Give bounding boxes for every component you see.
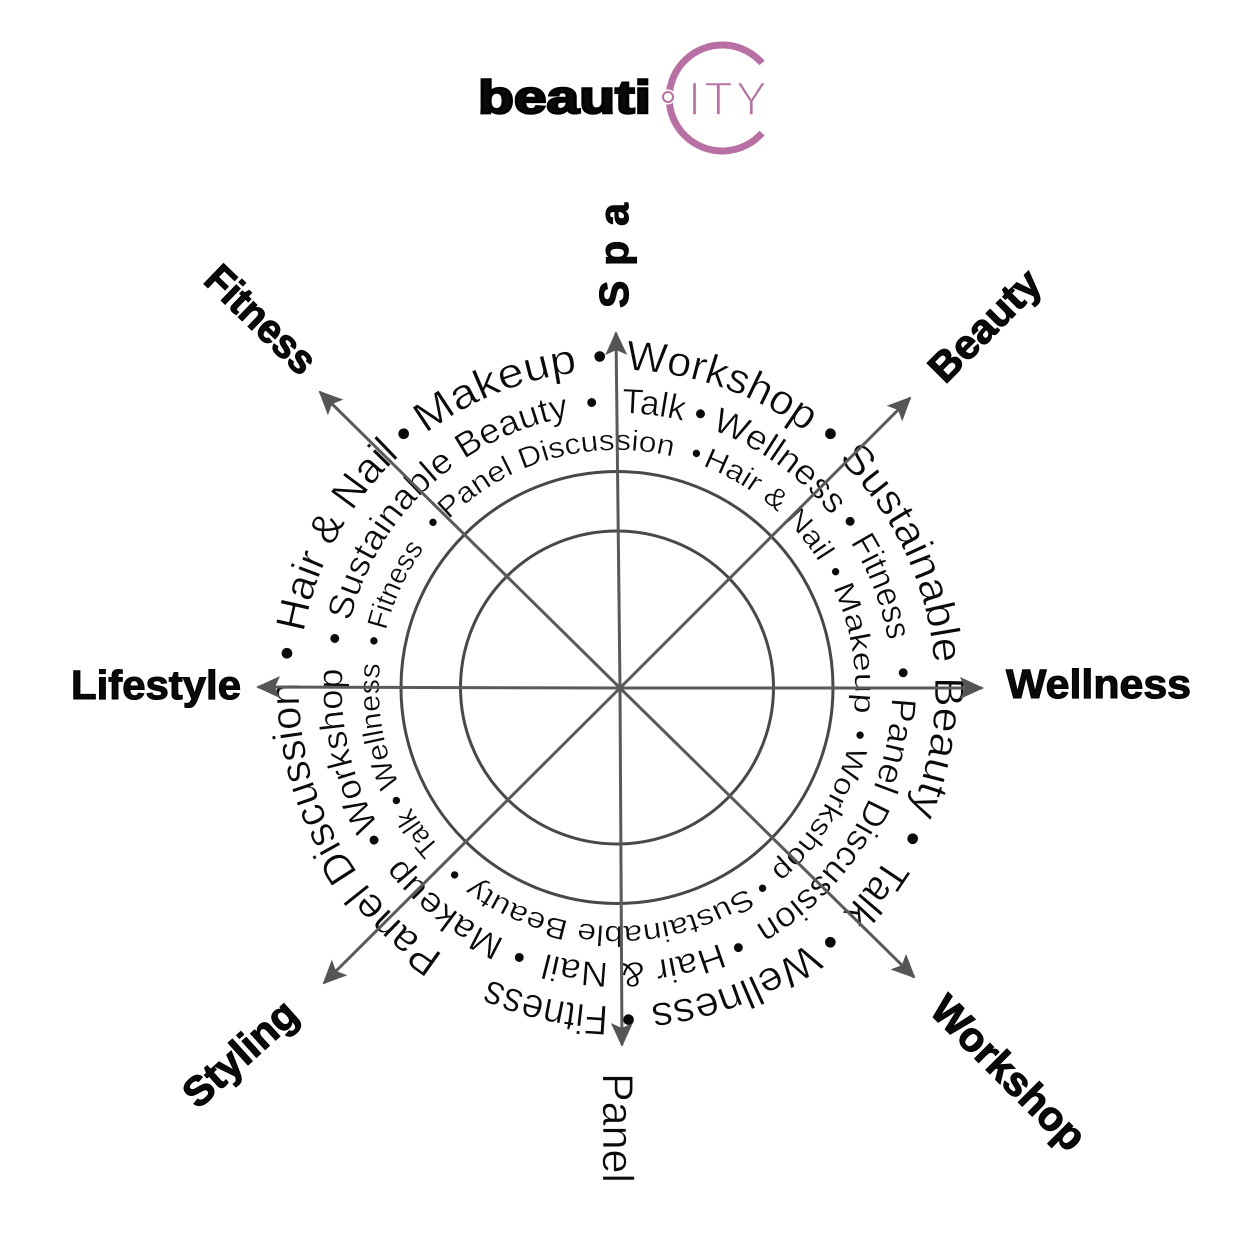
word: Makeup: Makeup (413, 352, 574, 431)
word: Beauty: Beauty (908, 680, 964, 820)
word: Fitness: Fitness (852, 532, 905, 638)
word: Fitness: Fitness (484, 982, 606, 1034)
inner text ring: • (832, 568, 840, 576)
inner text ring: • (418, 508, 449, 537)
logo wordmark: beauti: beauti (478, 71, 651, 123)
arrow: Wellness (620, 686, 982, 690)
word: Wellness: Wellness (718, 408, 842, 513)
arrow: Workshop (620, 688, 914, 977)
middle text ring: • (330, 634, 340, 644)
outer text ring: • (623, 1014, 634, 1025)
middle text ring (226, 302, 978, 1081)
words: Sustainable Beauty: Sustainable Beauty (453, 754, 761, 1043)
outer text ring (183, 257, 1070, 1122)
words: Panel Discussion: Panel Discussion (436, 430, 673, 518)
middle text ring: • (696, 409, 706, 418)
outer text ring: • (281, 648, 292, 659)
logo ring dot (662, 91, 674, 103)
axis label: Workshop: Workshop (922, 986, 1096, 1160)
word: Talk: Talk (624, 388, 686, 420)
radar circles (401, 472, 833, 904)
outer text ring: • (825, 936, 836, 948)
arrow: Beauty (620, 398, 910, 688)
axis label: Panel: Panel (593, 1073, 642, 1183)
inner text ring: • (380, 788, 414, 813)
arrow: Spa (616, 333, 620, 688)
axis label: Styling: Styling (173, 990, 307, 1117)
inner text ring (283, 334, 953, 1037)
inner text ring: • (758, 884, 766, 892)
arrow: Fitness (320, 392, 620, 688)
axis label: Lifestyle: Lifestyle (71, 662, 241, 708)
arrow: Lifestyle (258, 687, 620, 688)
arrow: Panel (620, 688, 622, 1045)
word: Wellness: Wellness (652, 948, 824, 1026)
inner text ring: • (358, 633, 391, 649)
logo: beautiCITY (478, 45, 767, 151)
inner text ring: • (441, 859, 469, 890)
inner text ring: • (692, 450, 700, 458)
word: Makeup: Makeup (390, 862, 502, 960)
outer text ring: • (594, 350, 606, 362)
outer text ring: • (907, 833, 918, 844)
inner text ring: • (856, 731, 864, 740)
axis label: Spa: Spa (591, 202, 637, 308)
middle text ring: • (846, 516, 855, 526)
logo letters: ITY: ITY (688, 72, 767, 125)
words: Panel Discussion: Panel Discussion (272, 685, 440, 976)
axis label: Wellness: Wellness (1006, 661, 1191, 707)
middle text ring: • (734, 942, 744, 952)
word: Sustainable: Sustainable (843, 445, 960, 660)
word: Workshop: Workshop (774, 752, 868, 878)
words: Panel Discussion: Panel Discussion (757, 700, 916, 939)
words: Hair & Nail: Hair & Nail (276, 436, 398, 630)
logo pink C arc (669, 45, 762, 151)
eight axis arrows (258, 333, 982, 1045)
middle text ring: • (369, 835, 379, 845)
word: Workshop: Workshop (628, 341, 814, 429)
word: Fitness: Fitness (362, 530, 433, 637)
middle text ring: • (514, 952, 524, 962)
arrow: Styling (324, 688, 620, 983)
outer text ring: • (398, 428, 409, 440)
words: Hair & Nail: Hair & Nail (542, 944, 726, 987)
word: Workshop: Workshop (319, 670, 375, 836)
axis label: Beauty: Beauty (919, 260, 1050, 391)
axis label: Fitness: Fitness (196, 255, 326, 384)
outer text ring: • (825, 428, 836, 440)
word: Talk: Talk (842, 866, 910, 927)
words: Hair & Nail: Hair & Nail (704, 448, 836, 560)
middle text ring: • (587, 398, 596, 408)
word: Makeup: Makeup (834, 582, 871, 712)
middle text ring: • (898, 668, 908, 678)
words: Sustainable Beauty: Sustainable Beauty (329, 398, 566, 618)
word: Talk: Talk (385, 799, 449, 864)
word: Wellness: Wellness (323, 650, 434, 796)
